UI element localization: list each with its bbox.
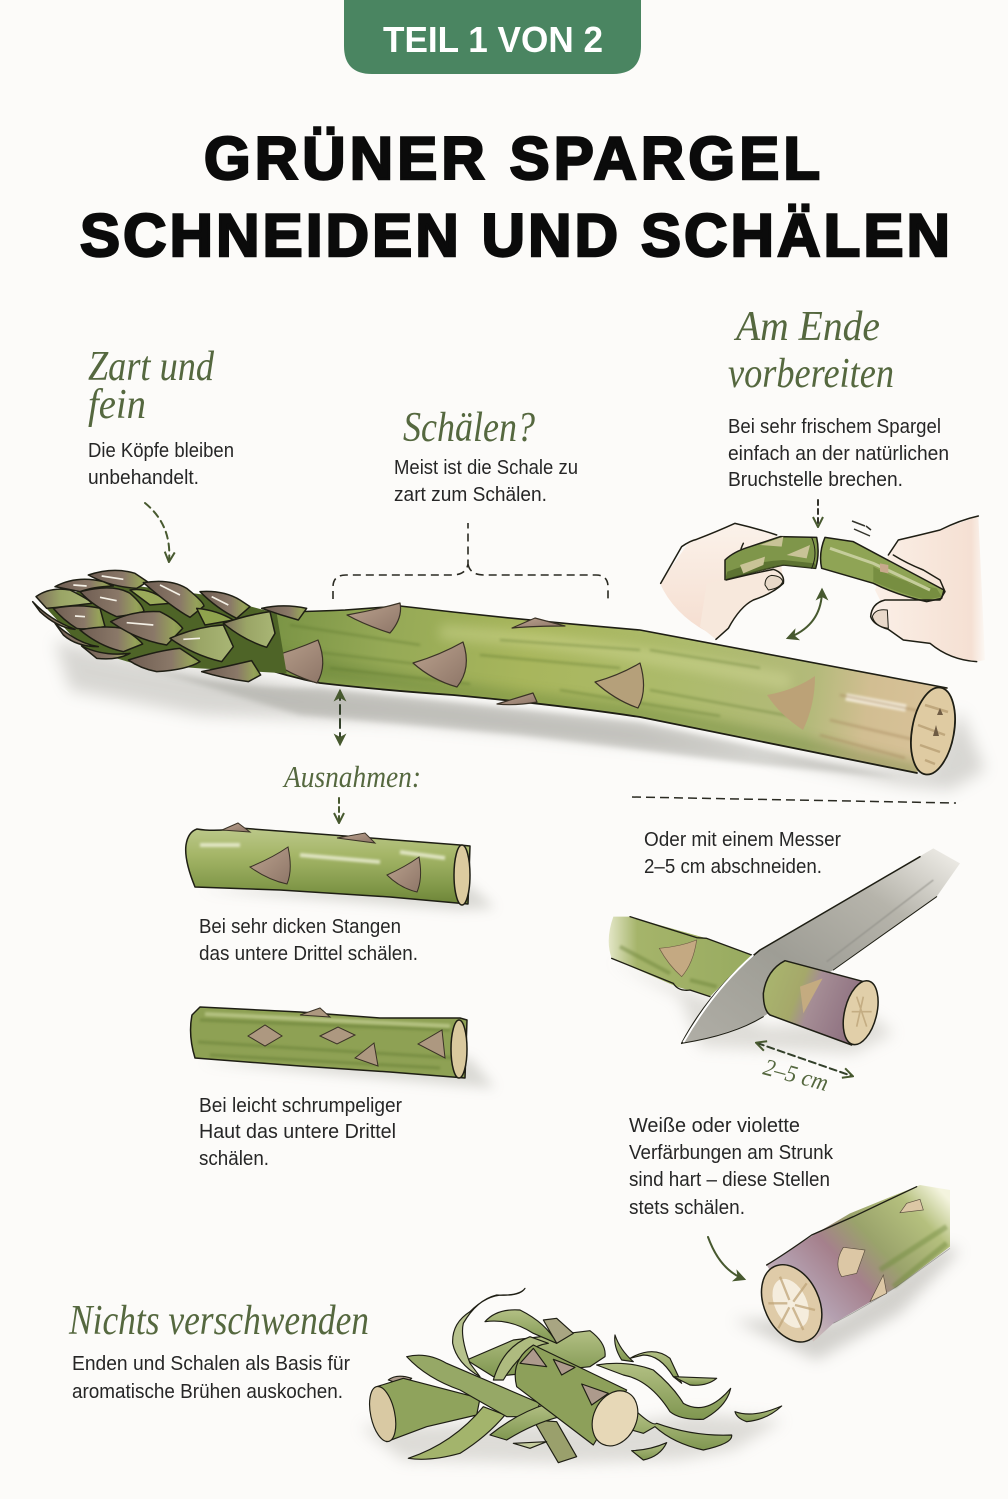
ground shadow [55,640,985,790]
arrow: down to examples [338,798,340,822]
badge: part 1 of 2 [344,0,641,74]
illustration: knife cutting stalk [609,848,960,1053]
callout: Schälen?: Schälen? [403,405,535,451]
motion marks [852,521,871,536]
stalk [767,1185,950,1342]
callout: Am Ende vorbereiten: vorbereiten [728,351,894,397]
shadow [610,960,893,1053]
stem nodes [267,603,815,730]
illustration: hands breaking asparagus [660,516,985,662]
arrow: bend direction [788,590,822,638]
bracket: stalk section [333,523,608,599]
text: discoloration: stets schälen. [629,1197,745,1219]
callout: Am Ende vorbereiten: Bei sehr frischem Spargel [728,416,941,438]
cut end [750,1255,834,1352]
arrow: 2-5 cm span [757,1043,852,1076]
cut end [905,684,961,778]
text: wrinkled skin: Haut das untere Drittel [199,1121,396,1143]
callout: Am Ende vorbereiten: einfach an der natürlichen [728,443,949,465]
title: GRÜNER SPARGEL [204,125,820,192]
callout: Zart und fein: unbehandelt. [88,467,199,489]
arrow: to discolored end [708,1237,744,1279]
illustration: main asparagus spear [33,570,985,790]
arrow: to asparagus head [145,503,169,561]
text: wrinkled skin: Bei leicht schrumpeliger [199,1095,402,1117]
callout: Am Ende vorbereiten [728,304,949,491]
text: thick stalks [199,916,418,965]
asparagus head [33,570,307,682]
callout: Zart und fein: Die Köpfe bleiben [88,440,234,462]
arrow: break point [817,500,819,526]
text: discoloration: Weiße oder violette [629,1115,800,1137]
callout: Nichts verschwenden: Enden und Schalen als Basis für [72,1353,350,1375]
arrow: exceptions up-down [339,691,341,744]
callout: Nichts verschwenden: aromatische Brühen auskochen. [72,1381,343,1403]
badge: part 1 of 2: TEIL 1 VON 2 [383,19,603,60]
text: knife [644,829,841,878]
divider: dashed line [632,797,956,803]
text: discoloration: Verfärbungen am Strunk [629,1142,834,1164]
title: SCHNEIDEN UND SCHÄLEN [80,202,950,269]
callout: Schälen?: Meist ist die Schale zu [394,457,578,479]
text: discoloration [629,1115,834,1219]
left hand [660,523,783,637]
text: thick stalks: Bei sehr dicken Stangen [199,916,401,938]
callout: Schälen? [394,405,578,506]
shadow [733,1247,960,1360]
left stalk piece [725,537,818,580]
text: wrinkled skin: schälen. [199,1148,269,1170]
callout: Am Ende vorbereiten: Bruchstelle brechen. [728,469,903,491]
text: knife: Oder mit einem Messer [644,829,841,851]
right hand and stalk [821,516,985,662]
shadow [360,1413,783,1463]
text: thick stalks: das untere Drittel schälen. [199,943,418,965]
stalk behind [609,917,752,997]
illustration: discolored stalk end [733,1185,960,1360]
illustration: wrinkled stalk [191,1007,495,1088]
blade [682,848,960,1043]
title [80,125,950,269]
cut piece [763,961,884,1048]
heading: Ausnahmen: Ausnahmen: [282,759,421,794]
right hand outline [871,516,978,662]
text: discoloration: sind hart – diese Stellen [629,1169,830,1191]
illustration: pile of ends and peels [360,1288,783,1463]
callout: Zart und fein [88,344,234,489]
stem [240,606,947,780]
callout: Nichts verschwenden: Nichts verschwenden [68,1298,369,1344]
callout: Zart und fein: fein [88,382,146,428]
text: wrinkled skin [199,1095,402,1170]
text: knife: 2–5 cm abschneiden. [644,856,822,878]
callout: Am Ende vorbereiten: Am Ende [733,304,880,350]
label: 2-5 cm: 2–5 cm [760,1055,831,1097]
callout: Nichts verschwenden [68,1298,369,1403]
left thumb [700,569,784,639]
illustration: thick stalk [186,823,495,910]
callout: Zart und fein: Zart und [88,344,215,390]
callout: Schälen?: zart zum Schälen. [394,484,547,506]
